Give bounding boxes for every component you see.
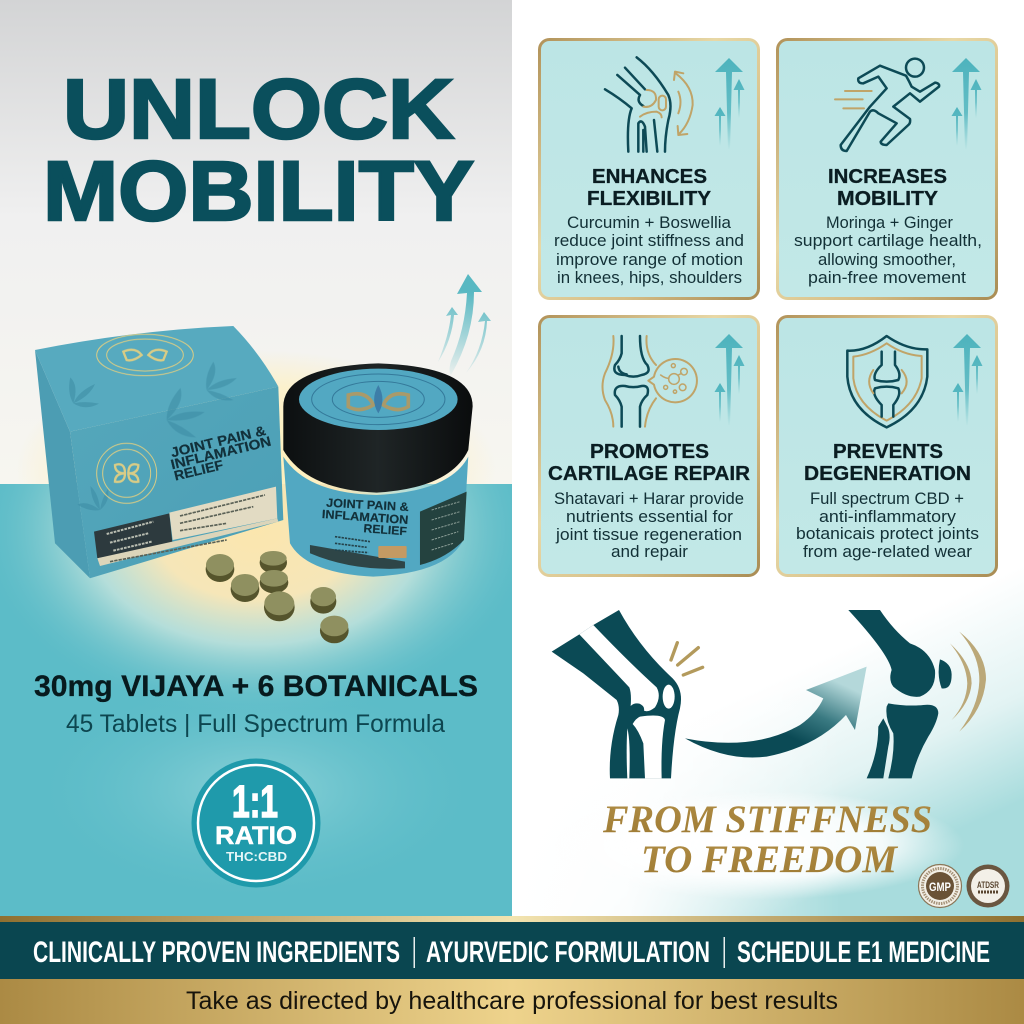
icon: knee with range of motion	[605, 57, 693, 152]
title line 1: UNLOCK	[63, 62, 454, 156]
card heading: PROMOTES	[590, 440, 709, 463]
product box	[35, 326, 283, 578]
icon: stiff knee	[552, 610, 703, 778]
icon: upward arrows	[952, 58, 982, 150]
tablets	[206, 551, 349, 643]
product photo: box, jar and tablets	[35, 326, 473, 643]
card heading: DEGENERATION	[804, 462, 971, 485]
stiffness to freedom illustration	[552, 610, 986, 778]
card body	[554, 490, 744, 561]
slogan: FROM STIFFNESS	[602, 798, 932, 841]
card heading	[804, 440, 971, 485]
card body: in knees, hips, shoulders	[557, 269, 742, 287]
claim 1: CLINICALLY PROVEN INGREDIENTS	[33, 936, 400, 969]
background: faint glow behind badge	[0, 680, 512, 918]
icon: shield with joint	[847, 336, 927, 427]
box label: INFLAMATION	[169, 434, 273, 472]
footer: gold directions band	[0, 979, 1024, 1024]
panel: promotes cartilage repair	[540, 316, 758, 576]
panel: enhances flexibility	[540, 40, 758, 298]
icon: upward arrows	[714, 334, 744, 426]
box label	[169, 423, 273, 484]
background: right panel	[512, 0, 1024, 918]
directions text: Take as directed by healthcare professional for best results	[186, 987, 838, 1015]
card body: nutrients essential for	[566, 508, 734, 526]
claim 2: AYURVEDIC FORMULATION	[426, 936, 710, 969]
card body	[554, 214, 744, 287]
icon: runner	[835, 59, 939, 151]
card body: Curcumin + Boswellia	[567, 214, 732, 232]
card body: botanicais protect joints	[796, 525, 979, 543]
icon: upward arrows	[714, 58, 744, 150]
ratio caption: THC:CBD	[226, 849, 287, 864]
card heading: INCREASES	[828, 165, 947, 188]
jar label: INFLAMATION	[321, 507, 409, 527]
ratio word: RATIO	[215, 822, 297, 850]
slogan	[602, 798, 932, 881]
card heading	[587, 165, 711, 210]
card body: Full spectrum CBD +	[810, 490, 964, 508]
card body: anti-inflammatory	[819, 508, 957, 526]
card body: joint tissue regeneration	[555, 526, 742, 544]
card body: from age-related wear	[803, 543, 973, 561]
footer: claims band	[0, 922, 1024, 979]
jar label: RELIEF	[363, 521, 407, 538]
card heading: FLEXIBILITY	[587, 187, 711, 210]
card body	[794, 214, 982, 287]
card body: pain-free movement	[808, 269, 966, 287]
card heading: CARTILAGE REPAIR	[548, 462, 750, 485]
badge: ATDSR	[966, 864, 1010, 908]
icon: free knee	[848, 610, 986, 778]
panel: prevents degeneration	[778, 316, 996, 576]
background: warm glow above the horizon	[0, 200, 512, 484]
arrow: stiffness to freedom	[685, 667, 867, 758]
jar label	[321, 496, 409, 538]
card body: reduce joint stiffness and	[554, 232, 744, 250]
badge: GMP: GMP	[929, 880, 951, 894]
background: right panel white fade	[512, 600, 842, 918]
panel: increases mobility	[778, 40, 996, 298]
card heading	[828, 165, 947, 210]
card heading: MOBILITY	[837, 187, 938, 210]
box label: JOINT PAIN &	[169, 423, 267, 460]
icon: upward arrows	[952, 334, 982, 426]
ratio number: 1:1	[232, 776, 278, 827]
slogan: TO FREEDOM	[641, 838, 898, 881]
white halo behind slogan	[555, 790, 965, 900]
card body: improve range of motion	[556, 251, 743, 269]
jar	[283, 363, 473, 577]
card body: and repair	[611, 543, 689, 561]
background: left lower teal panel	[0, 484, 512, 918]
badge: 1:1 ratio	[192, 758, 320, 888]
footer: gold trim	[0, 916, 1024, 922]
card body: support cartilage health,	[794, 232, 982, 250]
jar label: JOINT PAIN &	[326, 496, 409, 514]
badge: GMP	[918, 864, 962, 908]
formula subline: 45 Tablets | Full Spectrum Formula	[66, 710, 445, 738]
card heading: PREVENTS	[833, 440, 943, 463]
formula headline: 30mg VIJAYA + 6 BOTANICALS	[34, 670, 478, 703]
icon: joint with cell detail	[602, 336, 697, 427]
card body: allowing smoother,	[818, 251, 956, 269]
badge: ATDSR: ATDSR	[977, 880, 999, 890]
background: glow under the product	[0, 484, 512, 918]
card heading: ENHANCES	[592, 165, 707, 188]
card body	[796, 490, 979, 561]
title line 2: MOBILITY	[43, 144, 474, 238]
card body: Shatavari + Harar provide	[554, 490, 744, 508]
box label: RELIEF	[173, 457, 225, 484]
card body: Moringa + Ginger	[826, 214, 953, 232]
title	[43, 62, 474, 238]
card heading	[548, 440, 750, 485]
icon: rising arrows near product	[438, 274, 491, 375]
background: left upper panel	[0, 0, 512, 484]
